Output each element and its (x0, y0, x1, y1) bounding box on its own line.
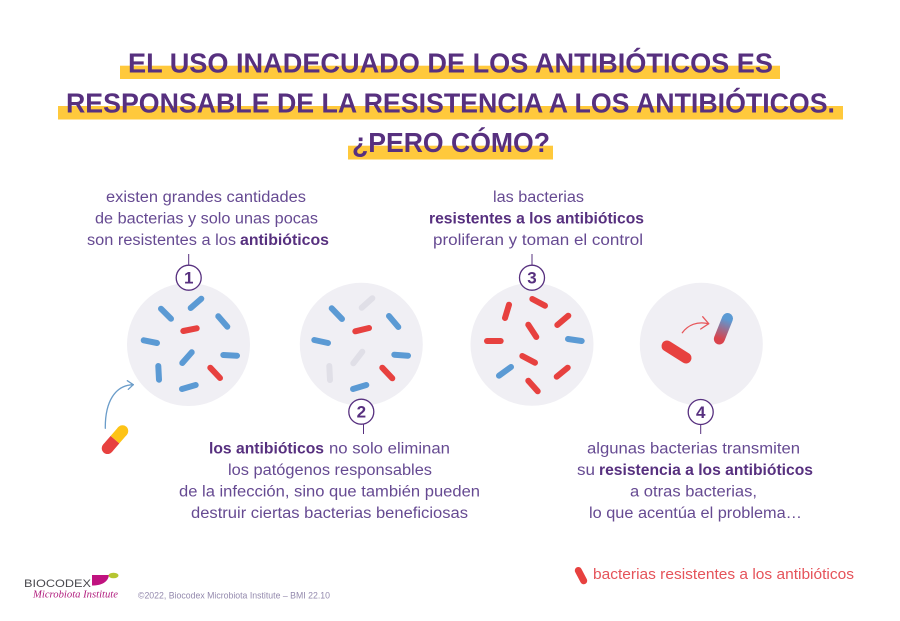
title: ¿PERO CÓMO? (352, 127, 550, 158)
text block: step 4: resistencia a los antibióticos (599, 462, 813, 479)
badge 4: 4 (696, 403, 706, 422)
resistant bacterium (667, 346, 686, 358)
text block: step 1 (87, 189, 329, 249)
text block: step 2: destruir ciertas bacterias beneficiosas (191, 505, 468, 522)
text block: step 2: de la infección, sino que también pueden (179, 484, 480, 501)
text block: step 4: algunas bacterias transmiten (587, 440, 800, 458)
bacteria group 2 (314, 298, 408, 389)
text block: step 2: los antibióticos (209, 440, 324, 458)
badge 2: 2 (357, 403, 366, 422)
text block: step 3: proliferan y toman el control (433, 232, 643, 249)
copyright: ©2022, Biocodex Microbiota Institute – BMI 22.10 (138, 590, 330, 600)
title: RESPONSABLE DE LA RESISTENCIA A LOS ANTIBIÓTICOS. (66, 88, 835, 118)
text block: step 2: no solo eliminan (329, 440, 450, 458)
text block: step 2: los patógenos responsables (228, 462, 432, 479)
text block: step 4: a otras bacterias, (630, 484, 757, 501)
text block: step 2 (179, 440, 480, 522)
badge 2 (349, 399, 374, 434)
arrow: gene transfer (682, 317, 709, 333)
panel: petri dish 3 (470, 283, 594, 406)
text block: step 4: lo que acentúa el problema… (589, 505, 802, 522)
panel: petri dish 4 (640, 283, 763, 406)
arrow: capsule to dish (105, 381, 133, 428)
badge 3 (520, 254, 544, 290)
text block: step 1: existen grandes cantidades (106, 189, 306, 206)
text block: step 3: resistentes a los antibióticos (429, 210, 644, 227)
badge 4 (688, 400, 713, 434)
legend: resistant bacteria: bacterias resistentes a los antibióticos (593, 567, 854, 583)
bacteria group 1 (144, 299, 237, 389)
bacteria group 3 (487, 299, 582, 391)
text block: step 1: de bacterias y solo unas pocas (95, 210, 318, 227)
icon: antibiotic capsule (102, 425, 128, 454)
text block: step 4 (577, 440, 813, 522)
text block: step 3: las bacterias (493, 189, 584, 206)
text block: step 1: son resistentes a los (87, 232, 236, 249)
badge 3: 3 (527, 269, 537, 288)
logo: Biocodex Microbiota Institute (24, 573, 118, 600)
badge 1: 1 (184, 269, 193, 288)
title: EL USO INADECUADO DE LOS ANTIBIÓTICOS ES (128, 48, 773, 78)
panel: petri dish 1 (127, 283, 250, 406)
logo: Biocodex Microbiota Institute: BIOCODEX (24, 578, 92, 590)
receiving bacterium (719, 318, 728, 339)
badge 1 (176, 254, 201, 290)
logo: Biocodex Microbiota Institute: Microbiota Institute (32, 590, 118, 600)
text block: step 4: su (577, 462, 595, 479)
text block: step 3 (429, 189, 644, 249)
title (58, 48, 843, 160)
text block: step 1: antibióticos (240, 232, 329, 249)
panel: petri dish 2 (300, 283, 423, 406)
